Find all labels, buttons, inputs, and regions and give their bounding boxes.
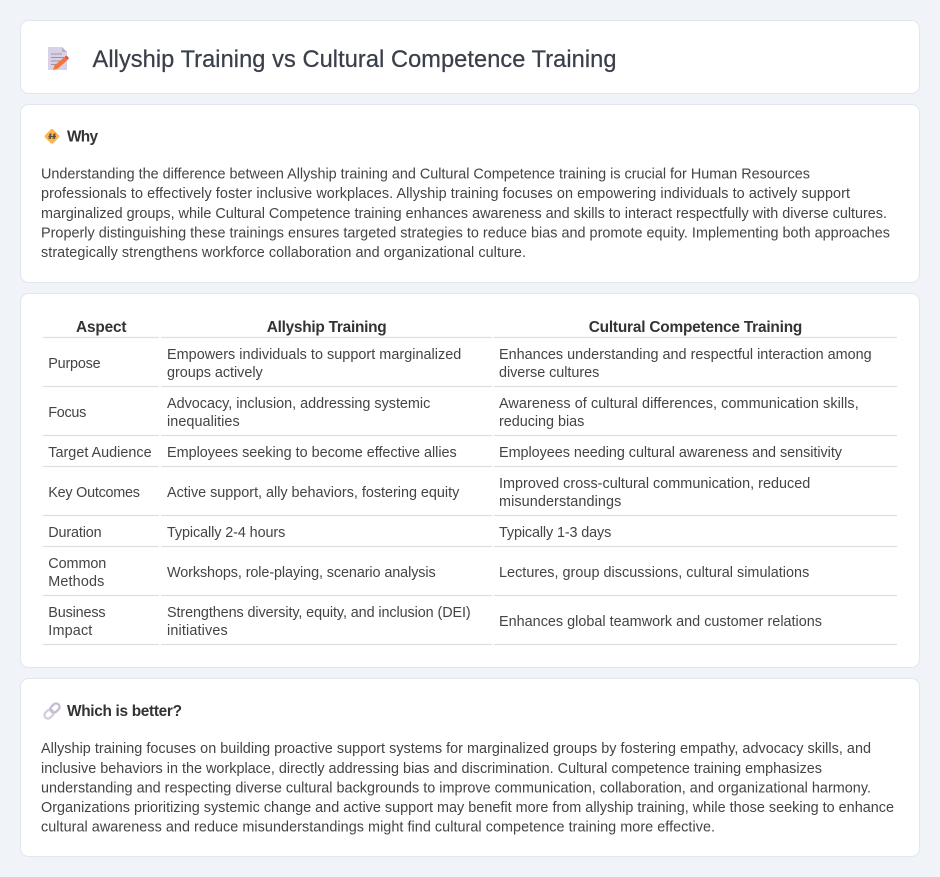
row: key outcomes: Key Outcomes: [48, 485, 140, 501]
why paragraph: marginalized groups, while Cultural Competence training enhances awareness and skills to interact respectfully with diverse cultures.: [41, 206, 887, 222]
row: duration: Typically 2-4 hours: [167, 525, 285, 541]
panel: why: [20, 104, 920, 282]
row: focus: Advocacy, inclusion, addressing systemic: [167, 396, 430, 412]
why paragraph: professionals to effectively foster inclusive workplaces. Allyship training focuses on empowering individuals to actively support: [41, 186, 850, 202]
row: business impact: Impact: [48, 623, 92, 639]
why paragraph: strategically strengthens workforce collaboration and organizational culture.: [41, 245, 526, 261]
panel: which is better: [20, 678, 920, 856]
row: duration: Typically 1-3 days: [499, 525, 611, 541]
row: purpose: [43, 347, 897, 386]
row: purpose: Enhances understanding and respectful interaction among: [499, 347, 872, 363]
row: key outcomes: misunderstandings: [499, 494, 621, 510]
row: common methods: [43, 556, 897, 596]
row: business impact: Strengthens diversity, equity, and inclusion (DEI): [167, 605, 471, 621]
row: duration: [43, 525, 897, 546]
which is better paragraph: inclusive behaviors in the workplace, directly addressing bias and discrimination. Cultural competence training emphasizes: [41, 761, 822, 777]
row: focus: inequalities: [167, 414, 240, 430]
row: business impact: initiatives: [167, 623, 228, 639]
row: purpose: diverse cultures: [499, 365, 599, 381]
title text: Allyship Training vs Cultural Competence Training: [92, 47, 616, 73]
row: business impact: Business: [48, 605, 106, 621]
row: business impact: Enhances global teamwork and customer relations: [499, 614, 822, 630]
row: focus: Awareness of cultural differences, communication skills,: [499, 396, 859, 412]
heading: why: Why: [67, 128, 98, 146]
row: common methods: Lectures, group discussions, cultural simulations: [499, 565, 809, 581]
row: common methods: Common: [48, 556, 106, 572]
row: target audience: Target Audience: [48, 445, 152, 461]
row: focus: [43, 396, 897, 436]
row: common methods: Workshops, role-playing, scenario analysis: [167, 565, 436, 581]
icon: memo: [48, 47, 69, 70]
row: target audience: Employees seeking to become effective allies: [167, 445, 457, 461]
panel: title: [20, 20, 920, 94]
heading: which is better: Which is better?: [67, 703, 182, 720]
which is better paragraph: cultural awareness and reduce misunderstandings might find cultural competence training more effective.: [41, 820, 715, 836]
row: key outcomes: Improved cross-cultural communication, reduced: [499, 476, 810, 492]
row: key outcomes: [43, 476, 897, 516]
row: purpose: Purpose: [48, 356, 101, 372]
row: target audience: Employees needing cultural awareness and sensitivity: [499, 445, 843, 461]
row: duration: Duration: [48, 525, 102, 541]
which is better paragraph: [41, 741, 894, 836]
row: key outcomes: Active support, ally behaviors, fostering equity: [167, 485, 460, 501]
row: purpose: groups actively: [167, 365, 263, 381]
row: focus: Focus: [48, 405, 86, 421]
panel: comparison table: [20, 294, 920, 668]
table header: Aspect: [76, 319, 126, 336]
why paragraph: Understanding the difference between Allyship training and Cultural Competence training is crucial for Human Resources: [41, 166, 810, 182]
row: common methods: Methods: [48, 574, 104, 590]
which is better paragraph: Organizations prioritizing systemic change and active support may benefit more from allyship training, while those seeking to enhance: [41, 800, 894, 816]
row: target audience: [43, 445, 897, 466]
table header: [43, 319, 897, 338]
row: focus: reducing bias: [499, 414, 584, 430]
why paragraph: Properly distinguishing these trainings ensures targeted strategies to reduce bias and promote equity. Implementing both approaches: [41, 226, 890, 242]
row: purpose: Empowers individuals to support marginalized: [167, 347, 461, 363]
table header: Allyship Training: [267, 319, 387, 336]
table header: Cultural Competence Training: [589, 319, 802, 336]
row: business impact: [43, 605, 897, 644]
which is better paragraph: Allyship training focuses on building proactive support systems for marginalized groups by fostering empathy, advocacy skills, and: [41, 741, 871, 757]
which is better paragraph: understanding and respecting diverse cultural backgrounds to improve communication, collaboration, and organizational harmony.: [41, 780, 871, 796]
why paragraph: [41, 166, 890, 261]
icon: children crossing sign: [44, 128, 60, 144]
icon: link: [43, 702, 61, 720]
